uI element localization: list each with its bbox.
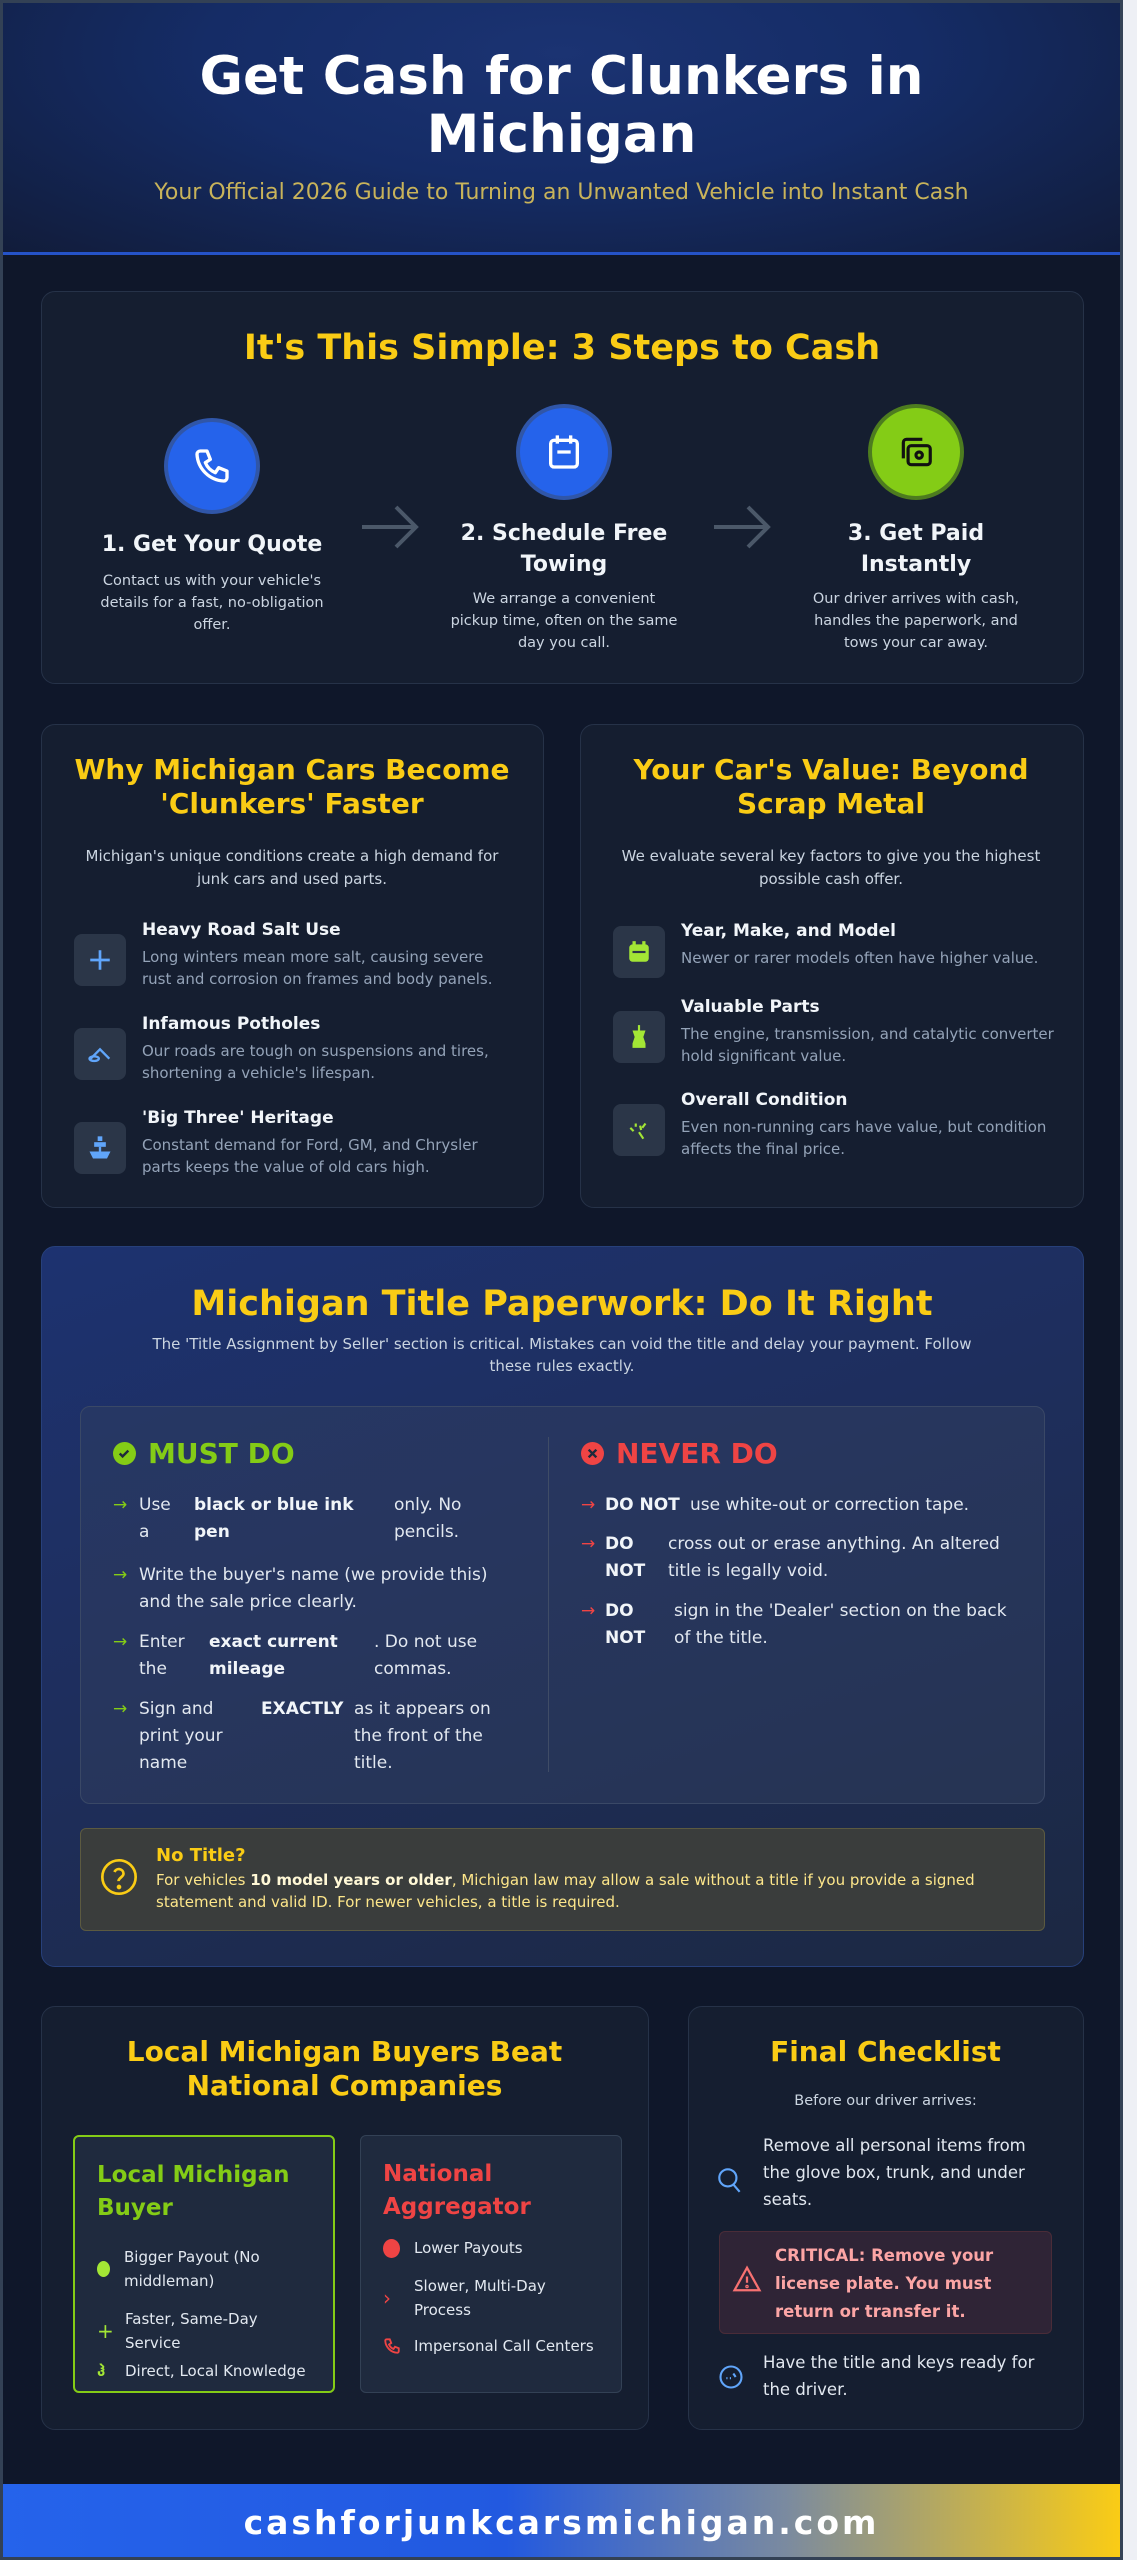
intro text: Michigan's unique conditions create a high demand for junk cars and used parts. (86, 847, 498, 888)
title: Get Cash for Clunkers in (199, 46, 924, 107)
column: never do: → (581, 1601, 595, 1621)
heading: Your Car's Value: Beyond (634, 753, 1028, 786)
heading: Why Michigan Cars Become (74, 753, 510, 786)
box: national aggregator: Impersonal Call Centers (414, 2337, 594, 2355)
column: must do: → (113, 1565, 127, 1585)
step 2: 2. Schedule Free Towing (461, 521, 667, 577)
column: must do: → (113, 1699, 127, 1719)
panel: final checklist: Before our driver arrives: (794, 2093, 977, 2109)
heading: must do: MUST DO (148, 1437, 295, 1470)
callout: no title: No Title? (156, 1845, 246, 1866)
box: national aggregator: › (383, 2286, 391, 2310)
column: never do: DO NOT (605, 1534, 645, 1581)
footer: cashforjunkcarsmichigan.com (244, 2502, 879, 2542)
column: must do: EXACTLY (261, 1699, 343, 1719)
item: potholes (74, 1014, 489, 1082)
item: valuable parts: Valuable Parts (681, 997, 820, 1017)
column: must do: Enter the (139, 1632, 185, 1679)
column: must do: Write the buyer's name (we provide this) and the sale price clearly. (139, 1565, 488, 1612)
box: national aggregator: Lower Payouts (414, 2239, 523, 2257)
panel: final checklist (688, 2006, 1084, 2430)
box: national aggregator: National (383, 2161, 492, 2187)
heading: Michigan Title Paperwork: Do It Right (191, 1284, 933, 1324)
heading (633, 753, 1028, 820)
step 1: Contact us with your vehicle's details for a fast, no-obligation offer. (100, 573, 324, 633)
step 3 (813, 404, 1019, 651)
item: condition: Even non-running cars have value, but condition affects the final price. (681, 1118, 1046, 1158)
column: must do: → (113, 1632, 127, 1652)
callout: critical: CRITICAL: Remove your license plate. You must return or transfer it. (775, 2246, 993, 2321)
heading: Final Checklist (770, 2035, 1001, 2068)
column: never do: cross out or erase anything. An altered title is legally void. (668, 1534, 1000, 1581)
item: road salt: Heavy Road Salt Use (142, 920, 341, 940)
arrow 1 (362, 506, 419, 548)
item: valuable parts: The engine, transmission, and catalytic converter hold significant value. (681, 1025, 1054, 1065)
item: year make model: Year, Make, and Model (681, 921, 896, 941)
box: local buyer: Direct, Local Knowledge (125, 2362, 306, 2380)
item: potholes: Infamous Potholes (142, 1014, 320, 1034)
item: potholes: Our roads are tough on suspensions and tires, shortening a vehicle's lifespan. (142, 1042, 489, 1082)
column: never do (581, 1437, 1007, 1648)
box: national aggregator (360, 2135, 622, 2393)
heading: Scrap Metal (737, 787, 925, 820)
item: personal items: Remove all personal items from the glove box, trunk, and under seats. (763, 2136, 1026, 2209)
column: never do: use white-out or correction tape. (690, 1495, 969, 1515)
item: big three: Constant demand for Ford, GM, and Chrysler parts keeps the value of old cars high. (142, 1136, 478, 1176)
step 2: We arrange a convenient (473, 591, 655, 607)
divider (548, 1437, 549, 1772)
item: title keys: Have the title and keys ready for the driver. (763, 2353, 1034, 2399)
step 3: Instantly (861, 552, 971, 577)
panel: car value (580, 724, 1084, 1208)
icon: calendar (516, 404, 612, 500)
column: never do: sign in the 'Dealer' section on the back of the title. (674, 1601, 1007, 1648)
callout: critical (719, 2231, 1052, 2334)
item: road salt (74, 920, 492, 988)
step 3: 3. Get Paid (848, 521, 984, 546)
box: local buyer: Bigger Payout (No middleman) (124, 2248, 260, 2290)
column: must do: exact current mileage (209, 1632, 338, 1679)
column: must do: only. No pencils. (394, 1495, 461, 1542)
intro text: The 'Title Assignment by Seller' section is critical. Mistakes can void the title and delay your payment. Follow these rules exactly. (153, 1335, 971, 1375)
subtitle: Your Official 2026 Guide to Turning an Unwanted Vehicle into Instant Cash (154, 180, 969, 205)
title: Michigan (427, 104, 696, 165)
icon: cash (868, 404, 964, 500)
rules box (80, 1406, 1045, 1804)
panel: title paperwork (41, 1246, 1084, 1967)
callout: no title (80, 1828, 1045, 1931)
box: local buyer: Buyer (97, 2195, 173, 2221)
column: never do: → (581, 1534, 595, 1554)
column: must do: Use a (139, 1495, 171, 1542)
box: local buyer: Local Michigan (97, 2162, 290, 2188)
heading (74, 753, 510, 820)
heading: 'Clunkers' Faster (160, 787, 424, 820)
panel: 3 steps (41, 291, 1084, 684)
column: must do (113, 1437, 491, 1773)
arrow 2 (714, 506, 771, 548)
box: local buyer: + (97, 2319, 114, 2343)
column: must do: black or blue ink pen (194, 1495, 354, 1542)
column: never do: DO NOT (605, 1495, 680, 1515)
heading: never do: NEVER DO (616, 1437, 778, 1470)
heading: steps: It's This Simple: 3 Steps to Cash (244, 328, 880, 368)
item: year make model (613, 921, 1038, 978)
box: national aggregator: Slower, Multi-Day Process (414, 2277, 546, 2319)
heading (127, 2035, 562, 2102)
step 1: 1. Get Your Quote (102, 532, 322, 557)
callout: no title: For vehicles 10 model years or older, Michigan law may allow a sale without a title if you provide a signed statement and valid ID. For newer vehicles, a title is required. (156, 1871, 975, 1911)
title (199, 46, 924, 165)
step 1 (100, 418, 324, 633)
column: must do: Sign and print your name (139, 1699, 223, 1773)
heading: Local Michigan Buyers Beat (127, 2035, 562, 2068)
step 3: Our driver arrives with cash, handles the paperwork, and tows your car away. (813, 591, 1019, 651)
column: must do: → (113, 1495, 127, 1515)
intro text: We evaluate several key factors to give you the highest possible cash offer. (622, 847, 1040, 888)
box: local buyer: Faster, Same-Day Service (125, 2310, 258, 2352)
item: big three: 'Big Three' Heritage (142, 1108, 334, 1128)
panel: local vs national (41, 2006, 649, 2430)
column: never do: → (581, 1495, 595, 1515)
column: never do: DO NOT (605, 1601, 645, 1648)
box: national aggregator: Aggregator (383, 2194, 531, 2220)
item: condition: Overall Condition (681, 1090, 847, 1110)
icon: question (101, 1859, 137, 1895)
header (3, 3, 1120, 255)
item: big three (74, 1108, 478, 1176)
box: local buyer: ჰ (97, 2362, 105, 2380)
column: must do: . Do not use commas. (374, 1632, 477, 1679)
item: valuable parts (613, 997, 1054, 1065)
step 2: pickup time, often on the same day you call. (451, 613, 677, 651)
step 2 (451, 404, 677, 651)
item: year make model: Newer or rarer models often have higher value. (681, 949, 1038, 967)
panel: why Michigan cars (41, 724, 544, 1208)
icon: phone (164, 418, 260, 514)
item: condition (613, 1090, 1046, 1158)
column: must do: as it appears on the front of the title. (354, 1699, 491, 1773)
item: road salt: Long winters mean more salt, causing severe rust and corrosion on frames and body panels. (142, 948, 492, 988)
footer (3, 2484, 1120, 2560)
heading: National Companies (187, 2069, 502, 2102)
box: local buyer (73, 2135, 335, 2393)
